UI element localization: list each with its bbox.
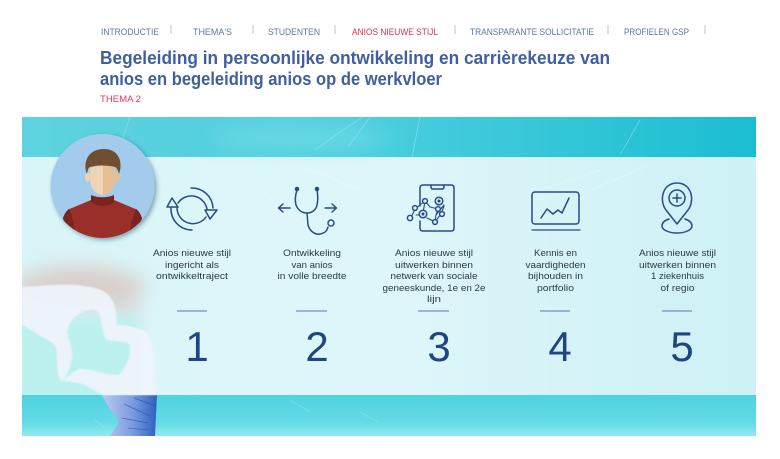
icon: location pin with plus (662, 183, 692, 233)
column 2: development (278, 188, 346, 370)
title: Begeleiding in persoonlijke ontwikkeling en carrièrekeuze van (100, 47, 610, 68)
number 1: 1 (185, 323, 209, 370)
label 2: Ontwikkeling (283, 248, 341, 259)
number 5: 5 (670, 323, 694, 370)
title (100, 47, 610, 89)
navigation bar: THEMA'S (193, 27, 232, 38)
navigation bar: STUDENTEN (268, 27, 320, 38)
label 4: Kennis en (534, 248, 577, 259)
panel: textured background (22, 117, 756, 436)
avatar: person in red sweater (50, 134, 154, 240)
label 4: bijhouden in (528, 271, 583, 282)
number 3: 3 (427, 323, 451, 370)
navigation bar (101, 25, 705, 38)
label 3: netwerk van sociale (390, 271, 478, 282)
label 5: 1 ziekenhuis (651, 271, 704, 282)
label 3: Anios nieuwe stijl (395, 248, 473, 259)
navigation bar: PROFIELEN GSP (624, 27, 689, 38)
label 1: Anios nieuwe stijl (153, 248, 231, 259)
photo: gloved hands forming a heart (5, 266, 157, 436)
navigation bar: INTRODUCTIE (101, 27, 159, 38)
title: anios en begeleiding anios op de werkvloer (100, 68, 442, 89)
label 5 (639, 248, 716, 294)
label 3 (382, 248, 486, 305)
column 1: transformation (153, 188, 231, 370)
label 3: lijn (427, 294, 441, 305)
navigation bar: TRANSPARANTE SOLLICITATIE (470, 27, 594, 38)
navigation bar: ANIOS NIEUWE STIJL (352, 27, 438, 38)
label 5: of regio (660, 283, 694, 294)
label 5: uitwerken binnen (639, 260, 716, 271)
label 4: portfolio (537, 283, 574, 294)
label 2: van anios (292, 260, 333, 271)
column 3: network (382, 185, 486, 370)
icon: cycle arrows (167, 188, 217, 230)
label 3: uitwerken binnen (395, 260, 473, 271)
label 4: vaardigheden (526, 260, 586, 271)
label 2 (278, 248, 346, 282)
icon: chart on screen (532, 192, 580, 230)
icon: tablet with network (407, 185, 454, 231)
subtitle: thema 2: THEMA 2 (100, 94, 141, 105)
label 1 (153, 248, 231, 282)
label 4 (526, 248, 586, 294)
column 5: hospital or region (639, 183, 716, 370)
label 1: ontwikkeltraject (156, 271, 228, 282)
label 5: Anios nieuwe stijl (639, 248, 716, 259)
icon: stethoscope with arrows (278, 188, 336, 234)
number 2: 2 (305, 323, 329, 370)
label 1: ingericht als (165, 260, 219, 271)
column 4: portfolio (526, 192, 586, 370)
number 4: 4 (548, 323, 572, 370)
label 3: geneeskunde, 1e en 2e (382, 283, 486, 294)
label 2: in volle breedte (278, 271, 346, 282)
